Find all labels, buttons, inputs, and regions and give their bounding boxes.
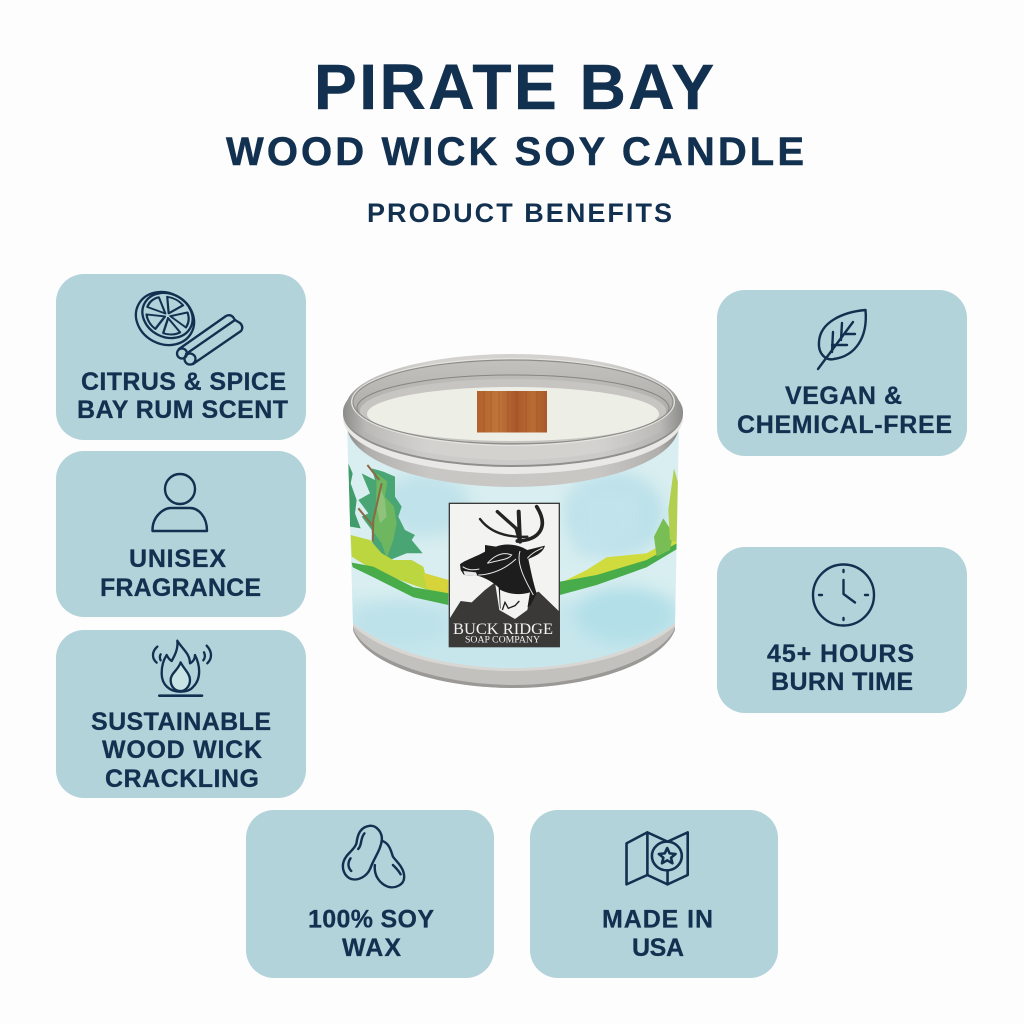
icon: person — [152, 474, 207, 531]
antlers — [480, 507, 542, 542]
right shore — [560, 537, 677, 588]
deer chest — [500, 590, 530, 618]
wood wick — [477, 391, 547, 432]
panel: soy wax — [246, 810, 494, 978]
infographic canvas — [56, 64, 967, 978]
logo text: SOAP COMPANY — [465, 636, 540, 646]
brand logo label — [449, 503, 559, 647]
label: soy wax: WAX — [342, 934, 401, 962]
tin rim bands — [347, 363, 679, 487]
left trees — [348, 463, 361, 528]
icon: leaf — [818, 310, 866, 369]
label: vegan and chemical-free: VEGAN & — [785, 382, 902, 410]
icon: clock — [813, 564, 874, 626]
panel: citrus and spice — [56, 274, 306, 440]
panel: sustainable wood wick — [56, 630, 306, 798]
icon: soy beans — [343, 826, 404, 887]
label: vegan and chemical-free — [737, 382, 952, 439]
title: PIRATE BAY — [314, 51, 714, 123]
label: vegan and chemical-free: CHEMICAL-FREE — [737, 411, 952, 439]
label: citrus and spice — [77, 368, 288, 424]
label: sustainable wood wick crackling: SUSTAINABLE — [91, 708, 271, 736]
section heading: product benefits: PRODUCT BENEFITS — [367, 198, 672, 228]
icon: folded map with star — [627, 832, 688, 884]
label: burn time — [767, 640, 914, 696]
label: unisex fragrance: UNISEX — [129, 545, 226, 573]
label: citrus and spice: CITRUS & SPICE — [81, 368, 286, 396]
label: made in usa — [602, 906, 713, 962]
label: burn time: BURN TIME — [771, 668, 913, 696]
label: soy wax — [308, 906, 434, 962]
left shore — [351, 535, 448, 597]
product image: candle tin — [340, 354, 685, 688]
panel: unisex fragrance — [56, 451, 306, 617]
tin interior and wax — [351, 358, 675, 446]
label: sustainable wood wick crackling — [91, 708, 271, 793]
label: made in usa: USA — [632, 934, 684, 962]
mountain — [449, 582, 559, 647]
panel: vegan and chemical-free — [717, 290, 967, 456]
label: sustainable wood wick crackling: WOOD WICK — [102, 736, 262, 764]
subtitle: WOOD WICK SOY CANDLE — [226, 130, 804, 174]
logo text: BUCK RIDGE — [453, 621, 553, 638]
label: made in usa: MADE IN — [602, 906, 713, 934]
icon: citrus slice and cinnamon sticks — [127, 282, 242, 364]
logo text — [453, 621, 553, 646]
panel: made in usa — [530, 810, 778, 978]
label: burn time: 45+ HOURS — [767, 640, 914, 668]
deer highlights — [463, 548, 543, 595]
panel: burn time — [717, 547, 967, 713]
deer head — [460, 544, 545, 617]
tin base — [353, 600, 675, 688]
label: unisex fragrance: FRAGRANCE — [100, 574, 261, 602]
label: soy wax: 100% SOY — [308, 906, 434, 934]
watercolor label — [347, 430, 679, 668]
label: unisex fragrance — [100, 545, 261, 602]
icon: crackling flame — [153, 641, 211, 696]
label: sustainable wood wick crackling: CRACKLING — [105, 765, 259, 793]
label: citrus and spice: BAY RUM SCENT — [77, 396, 288, 424]
